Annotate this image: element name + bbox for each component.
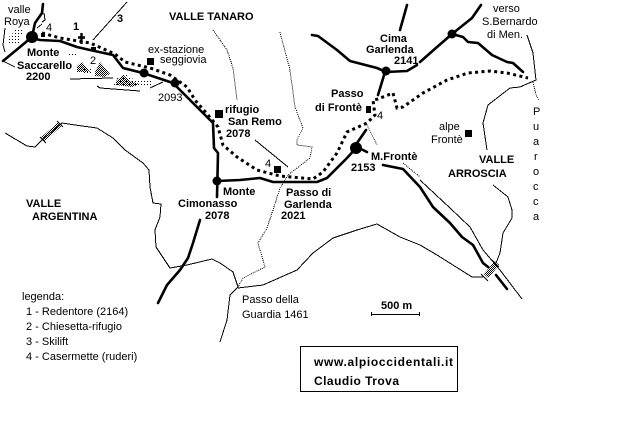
small labels north-west: 3	[117, 13, 123, 25]
label: Monte Cimonasso	[178, 186, 255, 222]
label: Monte Saccarello: Saccarello	[17, 60, 72, 72]
credits box: www.alpioccidentali.it	[313, 355, 453, 369]
icon: cross Redentore	[78, 33, 85, 44]
label: verso S.Bernardo di Men.: S.Bernardo	[482, 16, 538, 28]
hiking route	[42, 33, 528, 179]
label: Monte Cimonasso: Monte	[223, 186, 255, 198]
label: Monte Cimonasso: 2078	[205, 210, 229, 222]
label: 4 near Garlenda: 4	[265, 158, 271, 170]
label: alpe Frontè: Frontè	[431, 134, 463, 146]
label: Puarocca vertical: a	[533, 136, 540, 148]
credits box	[300, 346, 458, 392]
label: Monte Saccarello: 2200	[26, 71, 50, 83]
rocky areas	[8, 30, 153, 87]
building markers	[41, 33, 472, 173]
legend: legenda:	[22, 291, 64, 303]
label: 2093: 2093	[158, 92, 182, 104]
label: Cima Garlenda: Garlenda	[366, 44, 415, 56]
label: Puarocca vertical: o	[533, 166, 539, 178]
credits box: Claudio Trova	[314, 374, 399, 388]
label: verso S.Bernardo di Men.	[482, 3, 538, 41]
ridge lines	[3, 4, 523, 303]
label: Valle Argentina: VALLE	[26, 198, 61, 210]
label: Valle Arroscia: VALLE	[479, 154, 514, 166]
label: rifugio San Remo: rifugio	[225, 104, 259, 116]
label: Puarocca vertical: c	[533, 196, 539, 208]
label: Passo di Garlenda: Garlenda	[284, 199, 333, 211]
valley crossing hatching	[481, 260, 499, 281]
label: verso S.Bernardo di Men.: di Men.	[487, 29, 523, 41]
label: alpe Frontè: alpe	[439, 121, 460, 133]
scale bar	[372, 300, 420, 316]
label: rifugio San Remo: 2078	[226, 128, 250, 140]
label: ex-stazione seggiovia: seggiovia	[160, 54, 207, 66]
label: Passo della Guardia: Guardia 1461	[242, 309, 309, 321]
thin valley and road lines	[3, 2, 536, 342]
label: Passo di Frontè	[315, 88, 364, 114]
label: rifugio San Remo	[225, 104, 282, 140]
label: ex-stazione seggiovia: ex-stazione	[148, 44, 204, 56]
label: M.Frontè	[351, 151, 417, 174]
summit nodes	[26, 30, 456, 186]
label: Passo di Frontè: Passo	[331, 88, 364, 100]
legend: 4 - Casermette (ruderi)	[26, 351, 137, 363]
label: Monte Saccarello: Monte	[27, 47, 59, 59]
label: alpe Frontè	[431, 121, 463, 146]
label: Valle Arroscia	[448, 154, 514, 180]
label: Valle Arroscia: ARROSCIA	[448, 168, 507, 180]
small labels north-west: Roya	[4, 16, 31, 28]
label: Puarocca vertical: c	[533, 181, 539, 193]
small labels north-west: 2	[90, 55, 96, 67]
label: Passo di Garlenda: Passo di	[286, 187, 331, 199]
label: Puarocca vertical: u	[533, 121, 539, 133]
small labels north-west: 4	[46, 22, 52, 34]
scale bar: 500 m	[381, 300, 412, 312]
label: Puarocca vertical	[533, 106, 540, 223]
label: Monte Saccarello	[17, 47, 72, 83]
small labels north-west: 1	[73, 21, 79, 33]
label: Cima Garlenda: Cima	[380, 33, 408, 45]
legend: 1 - Redentore (2164)	[26, 306, 128, 318]
label: Valle Argentina	[26, 198, 97, 223]
label: Cima Garlenda: 2141	[394, 55, 418, 67]
label: Passo della Guardia: Passo della	[242, 294, 300, 306]
small labels north-west	[4, 4, 123, 67]
label: Puarocca vertical: P	[533, 106, 540, 118]
legend	[22, 291, 137, 363]
dotted paths	[213, 30, 539, 287]
skilift hatching west	[40, 121, 63, 143]
label: M.Frontè: 2153	[351, 162, 375, 174]
label: Cima Garlenda	[366, 33, 418, 67]
label: Passo di Garlenda: 2021	[281, 210, 305, 222]
label: Puarocca vertical: r	[534, 151, 538, 163]
label: Passo della Guardia	[242, 294, 309, 321]
label: ex-stazione seggiovia	[148, 44, 207, 66]
label: verso S.Bernardo di Men.: verso	[493, 3, 520, 15]
label: 4 near Frontè: 4	[377, 110, 383, 122]
label: rifugio San Remo: San Remo	[228, 116, 282, 128]
label: Passo di Garlenda	[281, 187, 333, 222]
label: Valle Tanaro: VALLE TANARO	[169, 11, 254, 23]
label: Puarocca vertical: a	[533, 211, 540, 223]
label: Monte Cimonasso: Cimonasso	[178, 198, 238, 210]
label: Passo di Frontè: di Frontè	[315, 102, 362, 114]
label: M.Frontè: M.Frontè	[371, 151, 417, 163]
legend: 2 - Chiesetta-rifugio	[26, 321, 122, 333]
legend: 3 - Skilift	[26, 336, 68, 348]
small labels north-west: valle	[8, 4, 31, 16]
label: Valle Argentina: ARGENTINA	[32, 211, 97, 223]
